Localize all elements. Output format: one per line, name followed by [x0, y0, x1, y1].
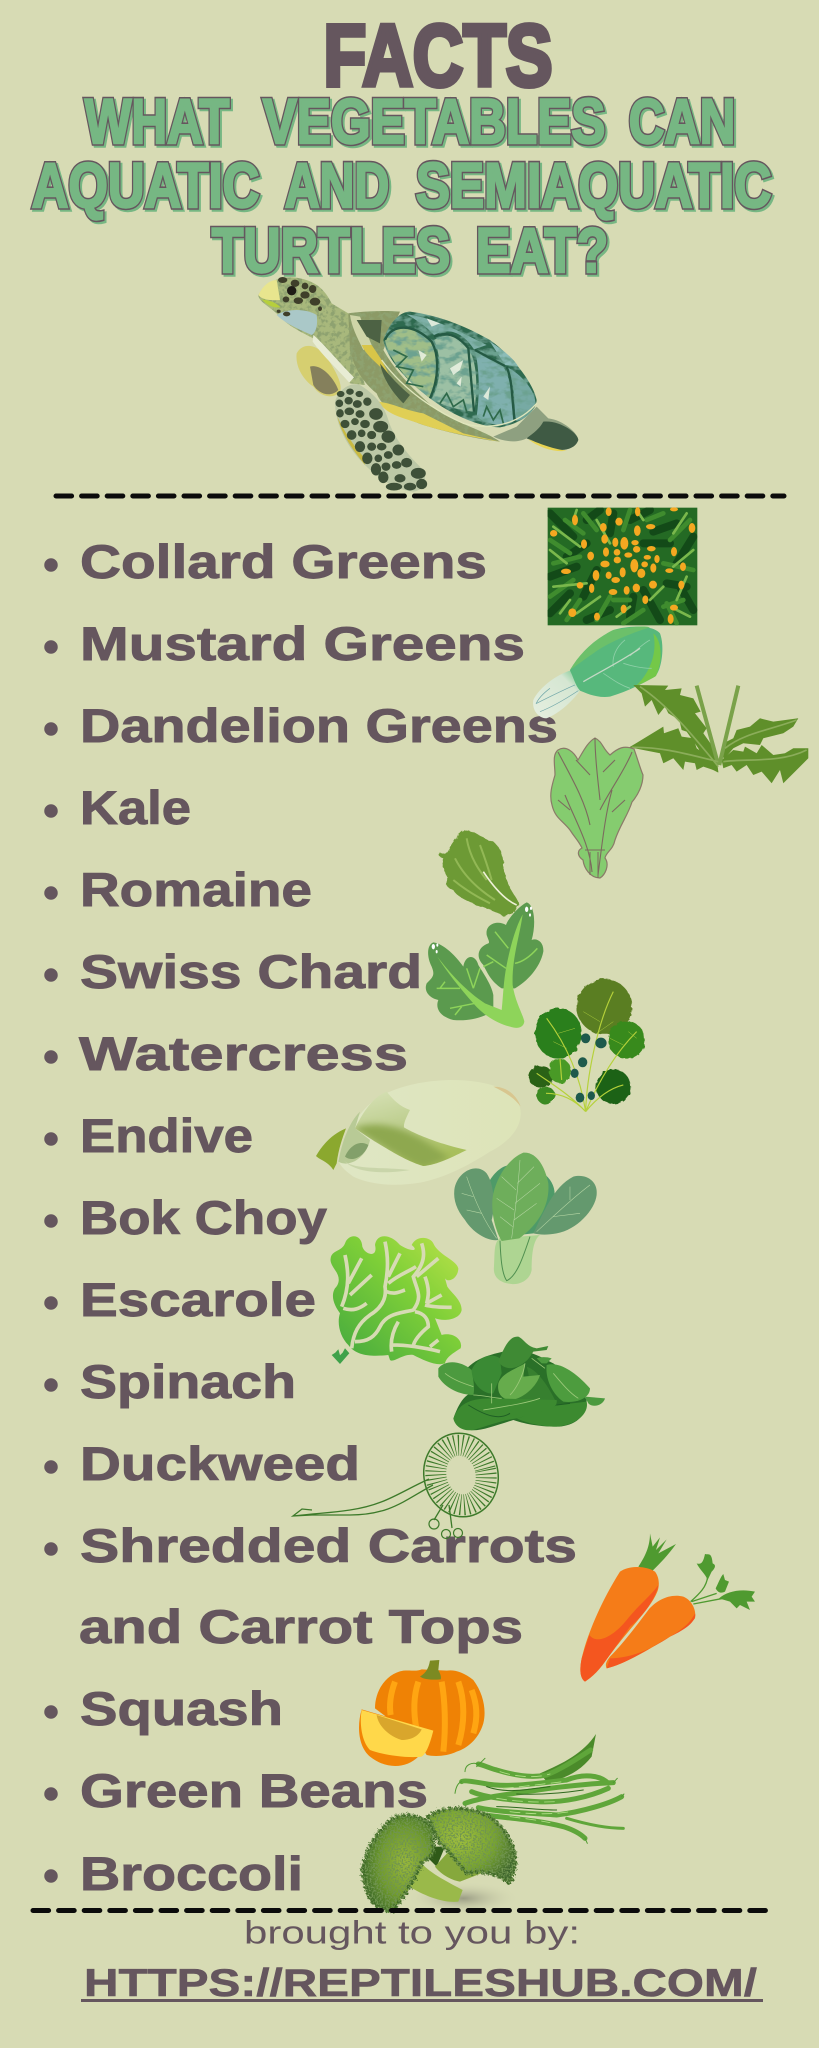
list item: broccoli: Broccoli: [80, 1847, 303, 1900]
list item: kale: [45, 781, 191, 834]
list item: collard greens: Collard Greens: [80, 535, 487, 588]
icon: kale: [551, 738, 643, 878]
list item: kale: Kale: [80, 781, 191, 834]
list item: spinach: Spinach: [80, 1355, 296, 1408]
list item: green beans: Green Beans: [80, 1764, 428, 1817]
url link: HTTPS://REPTILESHUB.COM/: [84, 1962, 757, 2005]
divider: bottom dashed line: [33, 1908, 768, 1913]
heading: what vegetables can aquatic and semiaquatic turtles eat: CAN: [629, 87, 735, 157]
icon: bok choy: [454, 1153, 597, 1284]
heading: what vegetables can aquatic and semiaquatic turtles eat: WHAT: [85, 87, 229, 157]
list item: bok choy: Bok Choy: [80, 1191, 327, 1244]
heading: what vegetables can aquatic and semiaquatic turtles eat: VEGETABLES: [263, 87, 605, 157]
list item: watercress: [45, 1027, 408, 1080]
icon: endive: [316, 1080, 521, 1185]
credit text: brought to you by:: [244, 1914, 580, 1950]
title: facts: FACTS: [324, 8, 552, 104]
divider: top dashed line: [56, 494, 784, 498]
list item: mustard greens: Mustard Greens: [80, 617, 525, 670]
icon: carrots: [580, 1533, 755, 1682]
list item: swiss chard: Swiss Chard: [80, 945, 422, 998]
list item: duckweed: Duckweed: [80, 1437, 360, 1490]
icon: broccoli: [363, 1809, 520, 1915]
heading: what vegetables can aquatic and semiaquatic turtles eat: TURTLES: [212, 216, 450, 286]
list item: shredded carrots and carrot tops: and Carrot Tops: [79, 1600, 523, 1653]
heading: what vegetables can aquatic and semiaquatic turtles eat: AQUATIC: [32, 151, 259, 221]
heading: what vegetables can aquatic and semiaquatic turtles eat: [32, 87, 771, 286]
list item: romaine: Romaine: [80, 863, 312, 916]
icon: romaine: [439, 830, 519, 917]
heading: what vegetables can aquatic and semiaquatic turtles eat: AND: [285, 151, 389, 221]
icon: sea turtle: [258, 277, 578, 492]
icon: escarole: [331, 1236, 462, 1364]
icon: duckweed: [293, 1426, 506, 1538]
heading: what vegetables can aquatic and semiaquatic turtles eat: EAT?: [476, 216, 608, 286]
heading: what vegetables can aquatic and semiaquatic turtles eat: WHAT: [85, 87, 229, 157]
list item: shredded carrots and carrot tops: [45, 1519, 577, 1653]
heading: what vegetables can aquatic and semiaquatic turtles eat: AND: [285, 151, 389, 221]
list item: squash: Squash: [80, 1682, 283, 1735]
list item: shredded carrots and carrot tops: Shredded Carrots: [80, 1519, 577, 1572]
heading: what vegetables can aquatic and semiaquatic turtles eat: AQUATIC: [32, 151, 259, 221]
icon: watercress: [528, 979, 645, 1112]
icon: green beans: [455, 1734, 624, 1843]
heading: what vegetables can aquatic and semiaquatic turtles eat: TURTLES: [212, 216, 450, 286]
panel: vegetable list: [45, 535, 577, 1900]
icon: spinach: [438, 1337, 605, 1430]
list item: escarole: Escarole: [80, 1273, 316, 1326]
heading: what vegetables can aquatic and semiaquatic turtles eat: CAN: [629, 87, 735, 157]
icon: mustard greens: [533, 627, 662, 718]
heading: what vegetables can aquatic and semiaquatic turtles eat: VEGETABLES: [263, 87, 605, 157]
icon: swiss chard: [426, 902, 543, 1028]
heading: what vegetables can aquatic and semiaquatic turtles eat: EAT?: [476, 216, 608, 286]
icon: pumpkin: [359, 1660, 485, 1766]
list item: watercress: Watercress: [79, 1027, 408, 1080]
list item: endive: Endive: [80, 1109, 253, 1162]
icon: collard greens: [548, 507, 697, 625]
icon: dandelion greens: [629, 685, 808, 783]
list item: dandelion greens: Dandelion Greens: [80, 699, 558, 752]
